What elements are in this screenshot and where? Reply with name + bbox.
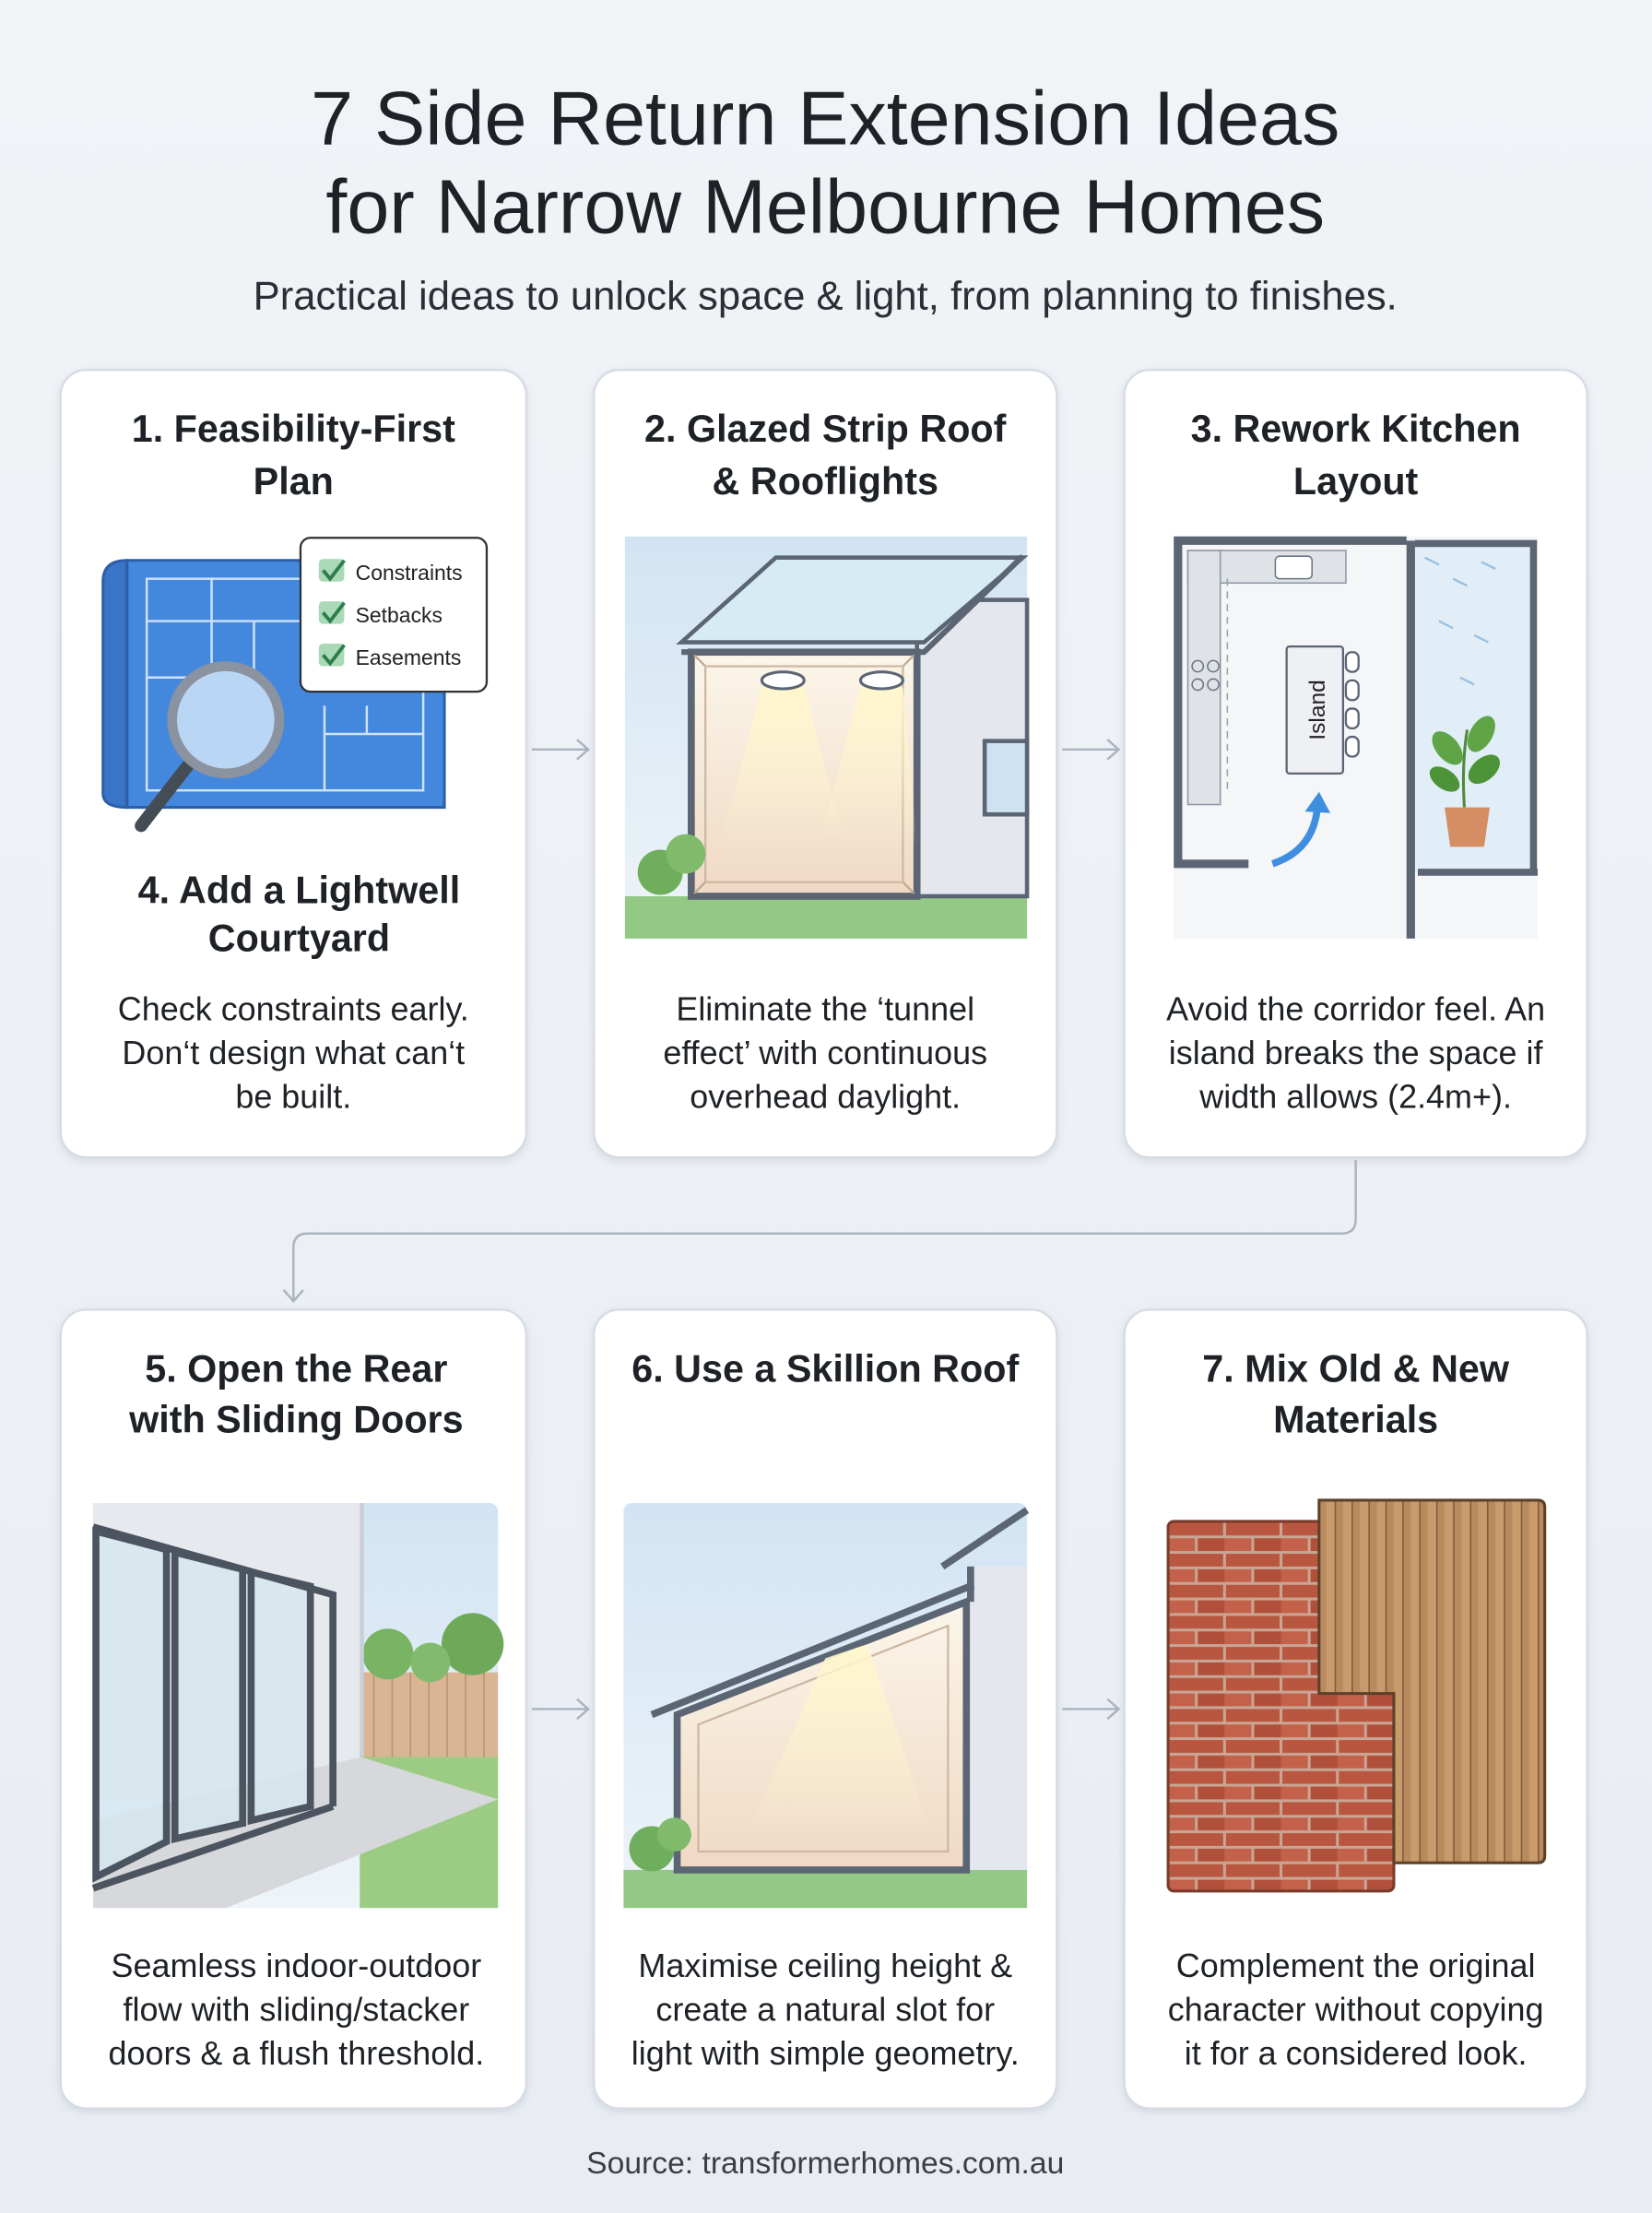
text: card 3 body: island breaks the space if (1169, 1034, 1543, 1071)
text: card 1 body: be built. (235, 1078, 351, 1116)
icon: blueprint with magnifier and checklist: Easements (356, 645, 461, 669)
text: card 1 body: Don‘t design what can‘t (122, 1034, 465, 1071)
text: card 5 body: Seamless indoor-outdoor (112, 1947, 481, 1984)
text: card 6 body: Maximise ceiling height & (638, 1947, 1012, 1984)
heading: card 2: 2. Glazed Strip Roof (644, 408, 1006, 450)
arrow: 6 to 7 (1062, 1699, 1119, 1719)
title: 7 Side Return Extension Ideas (311, 75, 1339, 160)
panel: card 6 skillion roof (594, 1309, 1056, 2109)
text: card 7 body: character without copying (1168, 1991, 1543, 2029)
heading: card 4 lightwell: Courtyard (208, 917, 390, 960)
icon: blueprint with magnifier and checklist (103, 538, 487, 825)
arrow: 1 to 2 (532, 740, 588, 760)
heading: card 1: 1. Feasibility-First (132, 408, 455, 450)
text: card 7 body: it for a considered look. (1185, 2034, 1527, 2072)
text: card 1 body: Check constraints early. (118, 990, 469, 1028)
text: card 5 body: doors & a flush threshold. (109, 2034, 484, 2072)
text: card 2 body: overhead daylight. (690, 1078, 961, 1116)
heading: card 7: Materials (1273, 1399, 1438, 1441)
heading: card 1: Plan (254, 460, 334, 503)
text: card 3 body: width allows (2.4m+). (1198, 1078, 1512, 1116)
panel: card 5 sliding doors (61, 1309, 526, 2109)
text: card 5 body: flow with sliding/stacker (124, 1991, 469, 2029)
illustration: skillion roof extension (623, 1503, 1027, 1908)
heading: card 5: with Sliding Doors (128, 1399, 464, 1441)
text: card 3 body: Avoid the corridor feel. An (1166, 990, 1545, 1028)
text: card 2 body: effect’ with continuous (663, 1034, 987, 1071)
subtitle: Practical ideas to unlock space & light, from planning to finishes. (254, 274, 1398, 318)
panel: card 1 feasibility (61, 370, 526, 1157)
illustration: kitchen floor plan (1174, 537, 1538, 939)
heading: card 3: Layout (1293, 460, 1419, 503)
text: card 6 body: light with simple geometry. (631, 2034, 1020, 2072)
illustration: brick and timber cladding (1168, 1500, 1545, 1891)
heading: card 7: 7. Mix Old & New (1202, 1347, 1509, 1390)
illustration: sliding doors to garden (93, 1503, 503, 1908)
heading: card 2: & Rooflights (713, 460, 938, 503)
panel: card 7 materials (1125, 1309, 1587, 2109)
icon: blueprint with magnifier and checklist: Setbacks (356, 603, 442, 627)
title: for Narrow Melbourne Homes (325, 164, 1325, 250)
icon: blueprint with magnifier and checklist: Constraints (356, 561, 463, 585)
heading: card 6: 6. Use a Skillion Roof (631, 1347, 1019, 1390)
panel: card 3 kitchen (1125, 370, 1587, 1157)
arrow: 5 to 6 (532, 1699, 588, 1719)
panel: card 2 glazed roof (594, 370, 1056, 1157)
title (311, 75, 1339, 250)
text: card 6 body: create a natural slot for (655, 1991, 995, 2029)
illustration: glazed roof extension (625, 537, 1027, 939)
source footer: Source: transformerhomes.com.au (586, 2147, 1064, 2181)
text: card 2 body: Eliminate the ‘tunnel (676, 990, 974, 1028)
illustration: kitchen floor plan: Island (1305, 680, 1330, 740)
heading: card 4 lightwell: 4. Add a Lightwell (138, 870, 460, 912)
arrow: connector row 1 to row 2 (284, 1160, 1356, 1301)
text: card 7 body: Complement the original (1176, 1947, 1535, 1984)
arrow: 2 to 3 (1062, 740, 1119, 760)
heading: card 5: 5. Open the Rear (145, 1347, 447, 1390)
heading: card 3: 3. Rework Kitchen (1191, 408, 1521, 450)
